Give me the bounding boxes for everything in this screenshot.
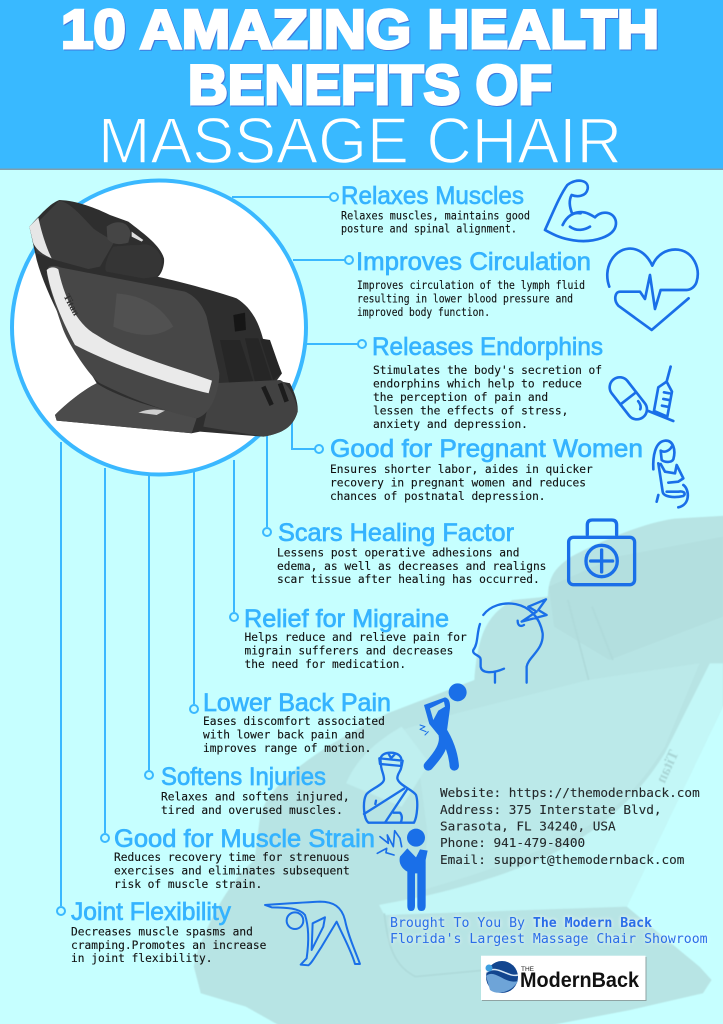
header banner: [0, 0, 723, 177]
description: posture and spinal alignment.: [341, 223, 517, 236]
contact details: Phone: 941-479-8400: [440, 835, 585, 850]
description: the need for medication.: [244, 658, 406, 671]
description: [244, 631, 467, 671]
heading: Improves Circulation: [356, 248, 591, 276]
icon: stretching figure: [265, 902, 360, 965]
description: recovery in pregnant women and reduces: [330, 476, 586, 490]
icon: flexed arm: [545, 181, 616, 241]
heading: Joint Flexibility: [71, 898, 231, 926]
description: Eases discomfort associated: [203, 715, 385, 728]
contact details: [440, 785, 700, 867]
description: Improves circulation of the lymph fluid: [357, 279, 585, 292]
description: Relaxes and softens injured,: [161, 791, 350, 804]
benefit 2: improves circulation: [356, 248, 698, 330]
description: lessen the effects of stress,: [373, 404, 568, 418]
description: Reduces recovery time for strenuous: [114, 851, 350, 864]
description: risk of muscle strain.: [114, 878, 262, 891]
description: improves range of motion.: [203, 742, 371, 755]
icon: head with lightning: [473, 599, 547, 683]
description: endorphins which help to reduce: [373, 378, 582, 390]
description: exercises and eliminates subsequent: [114, 864, 350, 878]
description: chances of postnatal depression.: [330, 490, 546, 503]
description: migrain sufferers and decreases: [244, 644, 453, 658]
description: improved body function.: [357, 306, 490, 319]
logo: THE: [521, 966, 535, 973]
heading: Relaxes Muscles: [341, 182, 524, 210]
icon: injured person: [364, 753, 417, 823]
description: [373, 364, 602, 431]
description: resulting in lower blood pressure and: [357, 292, 573, 306]
contact details: Website: https://themodernback.com: [440, 785, 700, 800]
description: Stimulates the body's secretion of: [373, 364, 602, 377]
description: Ensures shorter labor, aides in quicker: [330, 463, 593, 476]
description: scar tissue after healing has occurred.: [277, 573, 540, 586]
contact details: Address: 375 Interstate Blvd,: [440, 802, 662, 817]
description: edema, as well as decreases and realigns: [277, 560, 546, 573]
description: Decreases muscle spasms and: [71, 926, 253, 939]
watermark chair: Titan: [653, 748, 683, 786]
icon: heart pulse: [607, 249, 698, 330]
logo: [481, 956, 646, 1001]
heading: Lower Back Pain: [203, 689, 391, 717]
description: tired and overused muscles.: [161, 804, 343, 817]
description: cramping.Promotes an increase: [71, 939, 267, 952]
description: [114, 851, 350, 891]
contact details: Sarasota, FL 34240, USA: [440, 818, 616, 834]
title line 2: BENEFITS OF: [188, 53, 552, 116]
heading: Good for Muscle Strain: [114, 825, 375, 853]
brought to you by: Florida's Largest Massage Chair Showroom: [390, 932, 708, 947]
description: [341, 210, 530, 236]
benefit 1: relaxes muscles: [341, 181, 616, 241]
brought to you by: [390, 916, 708, 947]
description: Helps reduce and relieve pain for: [244, 631, 467, 644]
watermark chair: [194, 513, 723, 1024]
logo: ModernBack: [520, 969, 639, 992]
description: [330, 463, 593, 503]
benefit 10: joint flexibility: [71, 898, 360, 965]
description: with lower back pain and: [203, 728, 365, 742]
connector lines: [57, 193, 366, 915]
description: [161, 791, 350, 817]
description: the perception of pain and: [373, 391, 548, 404]
benefit 8: softens injuries: [161, 753, 417, 823]
heading: Relief for Migraine: [244, 605, 449, 633]
benefit 7: lower back pain: [203, 683, 467, 766]
description: in joint flexibility.: [71, 952, 212, 965]
heading: Releases Endorphins: [372, 333, 603, 361]
description: Lessens post operative adhesions and: [277, 546, 519, 560]
benefit 6: relief for migraine: [244, 599, 547, 683]
contact details: Email: support@themodernback.com: [440, 852, 685, 867]
benefit 9: good for muscle strain: [114, 825, 428, 911]
description: [277, 546, 546, 586]
description: [203, 715, 385, 755]
logo globe: [486, 961, 518, 993]
icon: person with shoulder pain: [377, 829, 428, 911]
description: anxiety and depression.: [373, 418, 528, 431]
description: Relaxes muscles, maintains good: [341, 210, 530, 222]
massage chair photo: [29, 200, 298, 437]
icon: pill and syringe: [606, 367, 673, 423]
description: [71, 926, 267, 965]
heading: Scars Healing Factor: [278, 519, 514, 547]
benefit 3: releases endorphins: [372, 333, 673, 431]
massage chair photo: Titan: [61, 292, 81, 318]
icon: back pain figure: [420, 683, 467, 766]
icon: pregnant woman: [653, 441, 688, 507]
description: [357, 279, 585, 319]
heading: Good for Pregnant Women: [330, 435, 643, 463]
benefit 4: pregnant women: [330, 435, 688, 507]
heading: Softens Injuries: [161, 763, 326, 791]
title line 3: MASSAGE CHAIR: [98, 104, 622, 177]
brought to you by: Brought To You By The Modern Back: [390, 916, 652, 931]
benefit 5: scars healing factor: [277, 519, 635, 586]
product circle: [12, 180, 306, 474]
icon: medical kit: [569, 520, 635, 585]
